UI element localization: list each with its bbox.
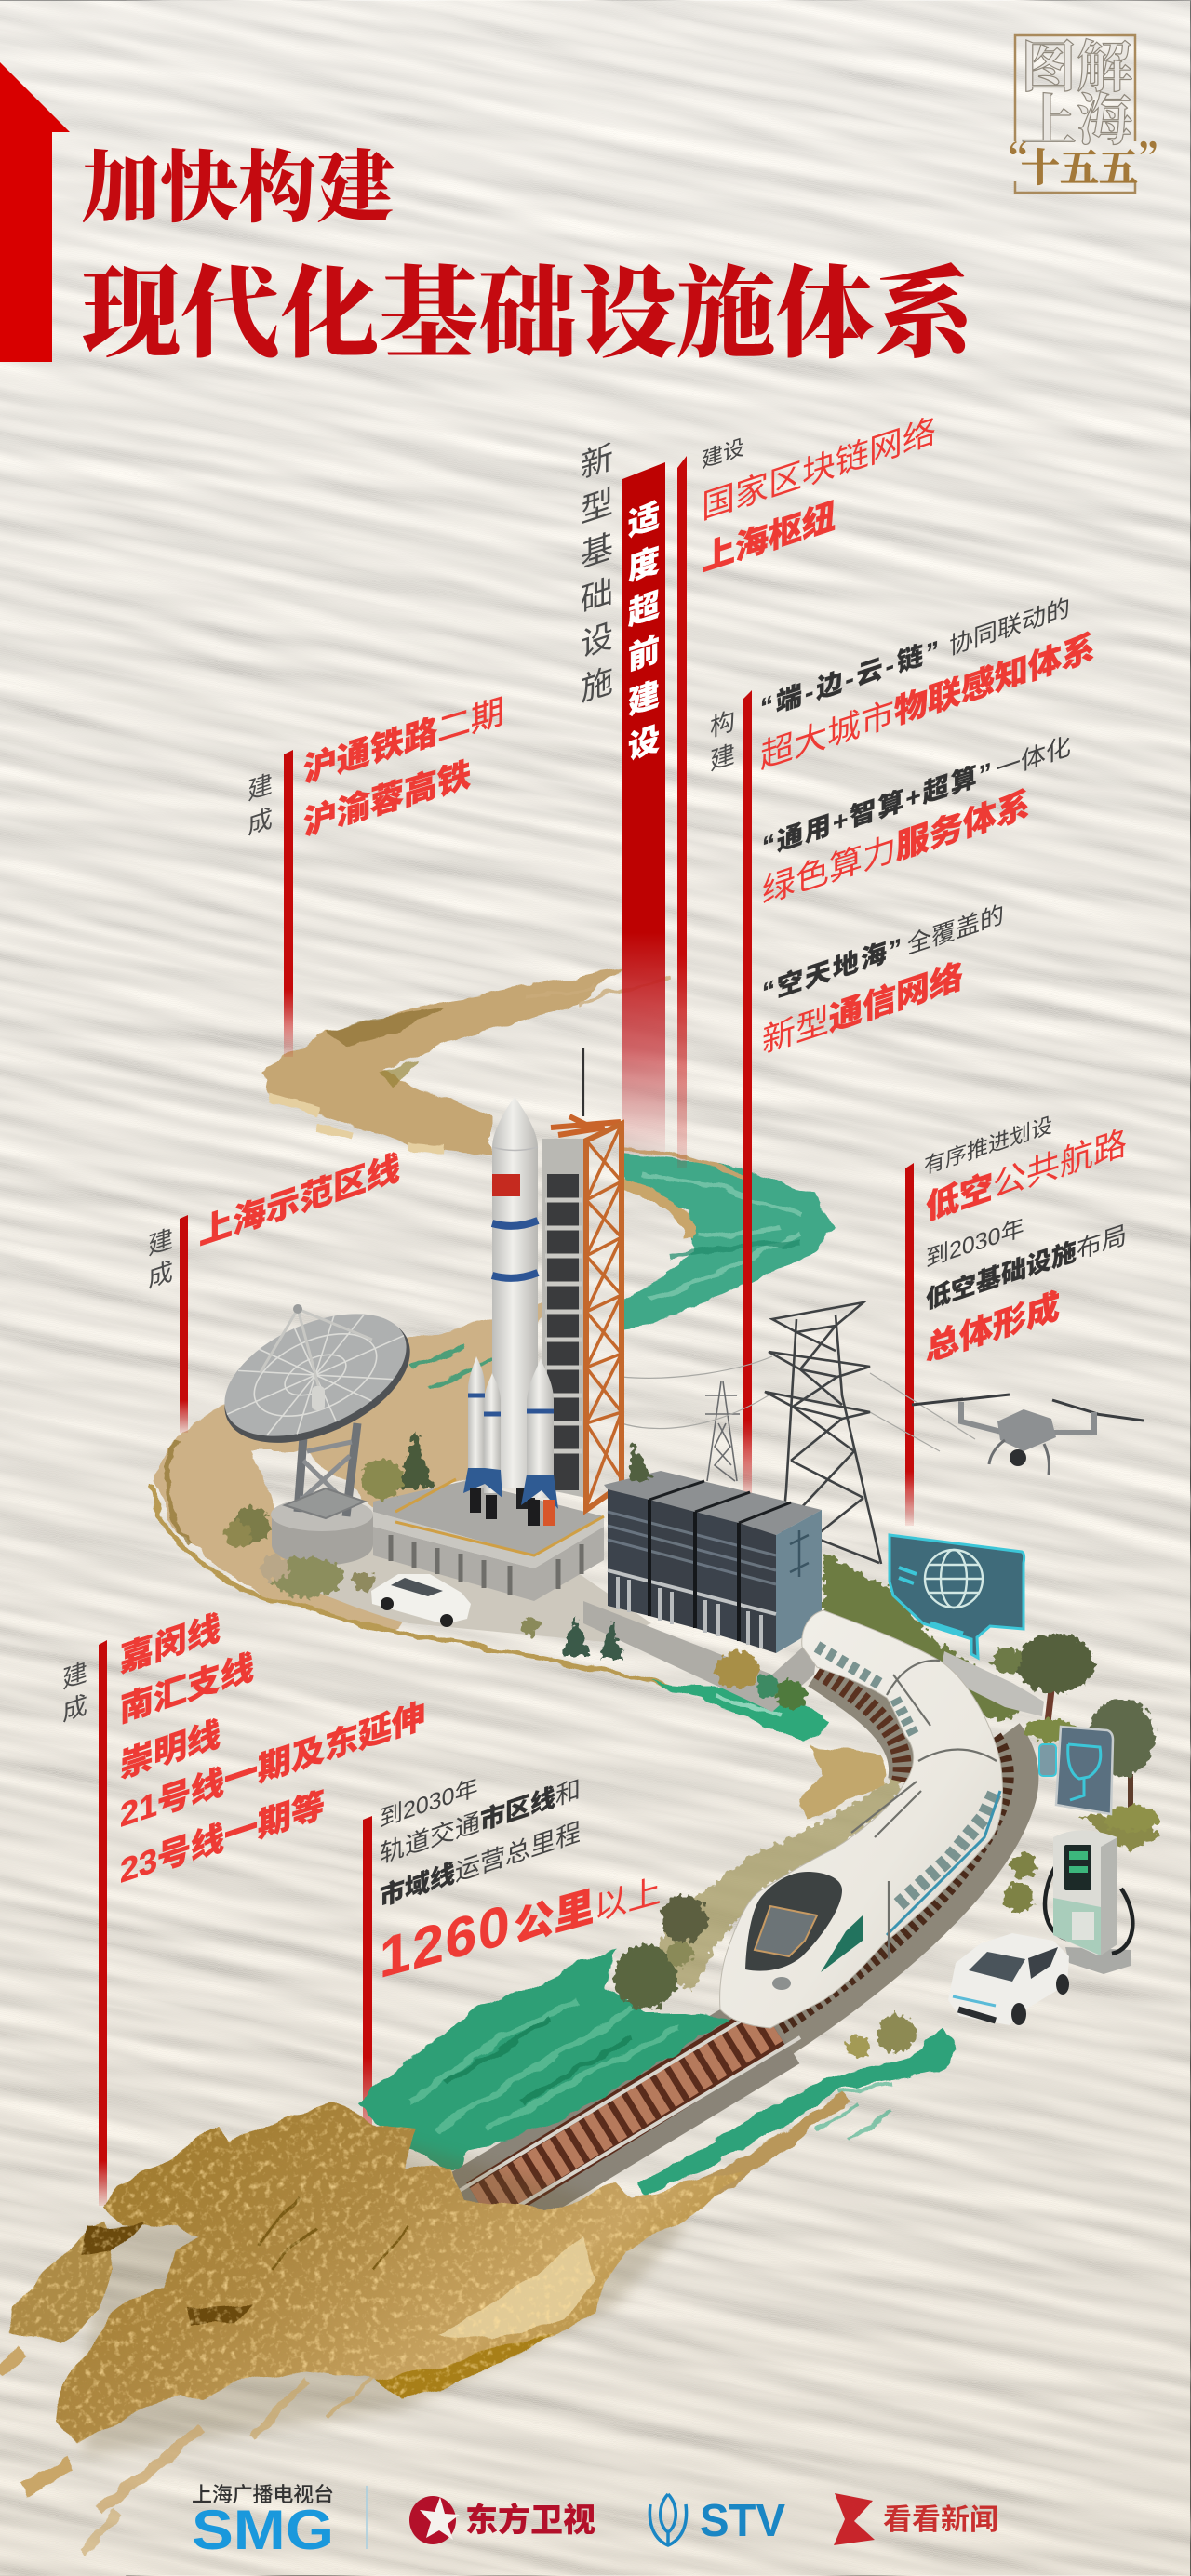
text: 低空公共航路: 低空公共航路 [926, 1124, 1127, 1227]
charger: body [1053, 1831, 1117, 1955]
gold paint blob shadow [84, 2140, 689, 2456]
logo: SMG: SMG [192, 2499, 334, 2561]
label: 适度超前建设: 适度超前建设 [628, 498, 660, 767]
tower: antenna [582, 1048, 584, 1116]
drone: body [997, 1409, 1056, 1451]
ground: road [261, 1544, 651, 1642]
list: metro lines: 崇明线 [120, 1715, 221, 1785]
text: 空天地海: 全覆盖的 [907, 901, 1004, 959]
text: 新型通信网络: 新型通信网络 [762, 956, 963, 1061]
servers: right side [776, 1510, 822, 1653]
text: 通用智算超算: “通用+智算+超算” [762, 756, 994, 862]
text: 端边云链: 协同联动的 [949, 594, 1070, 661]
text: 到2030年 rail: 到2030年 [380, 1774, 478, 1833]
bar: 建成 (high-speed rail) [284, 750, 293, 1057]
green paint left of track [357, 1949, 729, 2171]
green patch beside track curve [651, 1682, 887, 1818]
drone: arms [961, 1402, 1094, 1433]
bar: 构建 [743, 690, 752, 1502]
ground: curb [940, 1651, 1044, 1716]
logo: 东方卫视 [409, 2496, 596, 2544]
train: windows [817, 1647, 996, 1904]
track: upper curve [744, 1670, 1014, 2056]
screen: globe [925, 1550, 983, 1608]
logo: STV [649, 2494, 785, 2546]
train: nose cap [745, 1872, 842, 1971]
text: 市域线运营总里程: 市域线运营总里程 [380, 1817, 581, 1912]
dish: feed and struts [261, 1304, 372, 1410]
badge: 图解上海十五五: 上海 [1021, 76, 1132, 156]
list: metro lines [120, 1608, 425, 1890]
white car left [371, 1574, 471, 1627]
tan swirl around dish [153, 1298, 670, 1686]
badge: 图解上海十五五: “ [988, 129, 1029, 189]
text: 沪渝蓉高铁: 沪渝蓉高铁 [303, 755, 471, 843]
tower: orange lattice [586, 1124, 622, 1510]
high-speed train [720, 1610, 1002, 2028]
servers: concrete base [583, 1601, 819, 1712]
list: metro lines: 21号线一期及东延伸 [120, 1697, 425, 1835]
charger: base [1065, 1947, 1131, 1974]
list: metro lines: 南汇支线 [120, 1648, 254, 1729]
logo: 东方卫视: 东方卫视 [465, 2502, 596, 2539]
badge: 图解上海十五五: 图解 [1021, 23, 1132, 103]
dish: cylinder base [271, 1498, 373, 1565]
train: green accent [821, 1915, 863, 1972]
label: 构建: 构建 [710, 706, 735, 776]
text: 上海枢纽: 上海枢纽 [702, 496, 836, 579]
label: 建成 demo line: 建成 [148, 1224, 173, 1293]
ground: moss behind train [823, 1554, 1033, 1721]
text: 国家区块链网络: 国家区块链网络 [702, 412, 936, 527]
title arrow [0, 62, 70, 362]
dish: reflector [205, 1288, 429, 1469]
charger: hose [1045, 1865, 1132, 1954]
train: headlight [772, 1977, 791, 1990]
label: 建成 metro: 建成 [62, 1658, 87, 1727]
train: windshield [755, 1906, 817, 1956]
title: 现代化基础设施体系 [82, 234, 977, 377]
text: 总体形成: 总体形成 [926, 1286, 1060, 1368]
badge: 图解上海十五五: 十五五 [1021, 138, 1138, 194]
logo: STV: STV [700, 2496, 785, 2546]
logo: 看看新闻: 看看新闻 [883, 2503, 998, 2536]
bushes: right of train nose [614, 1852, 1037, 2058]
badge: 图解上海十五五: ” [1137, 129, 1178, 189]
bar: 适度超前建设 band [622, 462, 665, 1154]
rocket: boosters [463, 1356, 558, 1509]
green brush band behind rocket [622, 1149, 836, 1328]
badge: 图解上海十五五 [988, 23, 1178, 194]
text: 有序推进划设: 有序推进划设 [924, 1113, 1052, 1180]
list: metro lines: 嘉闵线 [120, 1608, 221, 1679]
tower: service structure [542, 1116, 621, 1498]
text: 端边云链: “端-边-云-链” [760, 634, 942, 724]
railway track [448, 1670, 1014, 2212]
track: straight section [448, 2019, 800, 2212]
text: 通用智算超算: 一体化 [996, 731, 1071, 784]
text: 沪通铁路二期: 沪通铁路二期 [303, 692, 504, 790]
charging sign [1039, 1727, 1113, 1814]
train: body [720, 1610, 1002, 2028]
transmission wires [622, 1356, 975, 1451]
launch tower [542, 1048, 622, 1510]
bar: 市域线 [99, 1640, 107, 2206]
label: 建设: 建设 [702, 434, 744, 474]
charging station [1045, 1831, 1132, 1974]
ground: moss near charger sign [1079, 1814, 1158, 1851]
drone [912, 1395, 1144, 1475]
title: 加快构建 [82, 126, 395, 238]
bar: 建设 [677, 456, 687, 1168]
text: 轨道交通市区线和: 轨道交通市区线和 [380, 1774, 581, 1869]
label: 新型基础设施: 新型基础设施 [581, 437, 613, 709]
text: 低空基础设施布局: 低空基础设施布局 [926, 1220, 1127, 1315]
gold strip under right green [642, 2093, 849, 2219]
logo: SMG: 上海广播电视台 [192, 2483, 334, 2506]
large pylon [765, 1302, 881, 1564]
ground: scene base [261, 1544, 1158, 1991]
gold paint blob [9, 2105, 744, 2447]
ground: olive strip inside train curve [651, 1768, 907, 1991]
text: 超大城市物联感知体系: 超大城市物联感知体系 [760, 627, 1095, 776]
white car right [948, 1933, 1069, 2025]
text: 到2030年 low altitude: 到2030年 [926, 1214, 1024, 1273]
rocket: nozzles [470, 1488, 555, 1526]
logo: 看看新闻 [834, 2493, 998, 2545]
charger: screen [1064, 1845, 1091, 1890]
text: 上海示范区线: 上海示范区线 [199, 1149, 400, 1252]
train: roof seams [851, 1661, 997, 1959]
bar: 运营里程 [363, 1816, 372, 2152]
rocket [463, 1097, 558, 1526]
text: 空天地海: “空天地海” [762, 932, 903, 1008]
text: 1260公里以上: 1260公里以上 [380, 1851, 661, 1990]
bar: 上海示范区线 [180, 1215, 188, 1433]
dish: pedestal [285, 1423, 365, 1518]
label: 建成 rail: 建成 [248, 769, 273, 840]
trees right [992, 1634, 1158, 1832]
small pylon [705, 1381, 740, 1481]
upper gold brush strand [262, 969, 670, 1156]
launch platform [373, 1479, 604, 1601]
drone: propellers [912, 1395, 1144, 1421]
satellite dish [205, 1288, 429, 1565]
list: metro lines: 23号线一期等 [120, 1785, 325, 1890]
hologram screen [890, 1535, 1024, 1658]
servers: fronts [608, 1489, 776, 1653]
rocket: core stage [492, 1097, 538, 1509]
train: blue stripe [887, 1791, 1000, 1935]
bar: 低空 [905, 1163, 914, 1526]
gold brush streaks [0, 2354, 377, 2554]
green paint right of track [638, 2025, 957, 2196]
bushes and trees: left scene [225, 1428, 806, 1710]
server cabinets [583, 1471, 822, 1712]
servers: top [604, 1471, 822, 1535]
drone: legs and camera [989, 1440, 1049, 1475]
title [82, 126, 977, 377]
text: 绿色算力服务体系: 绿色算力服务体系 [762, 785, 1030, 911]
